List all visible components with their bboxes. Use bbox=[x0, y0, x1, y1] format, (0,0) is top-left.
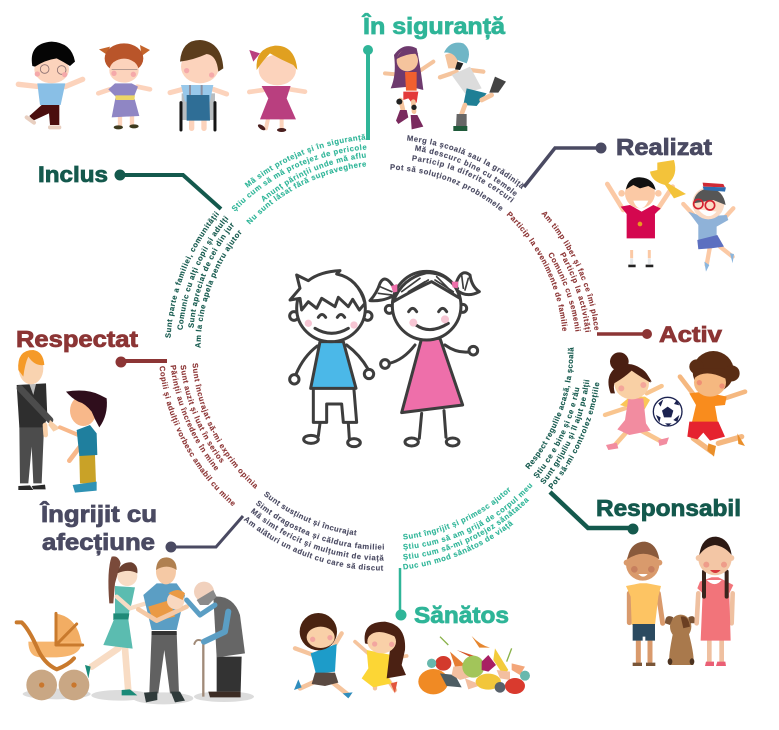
child in wheelchair bbox=[170, 40, 227, 130]
girl bbox=[370, 271, 479, 446]
arc text: Sănătos: Sunt îngrijit și primesc ajutor bbox=[403, 487, 510, 540]
man in suit bbox=[17, 350, 60, 490]
arc text: Realizat: Pot să soluționez problemele bbox=[390, 164, 502, 211]
connector: Sănătos bbox=[396, 568, 406, 620]
connector: Inclus bbox=[114, 170, 221, 209]
arc text: Respectat: Părinții au încredere în mine bbox=[170, 365, 218, 470]
arc text: În siguranță: Mă simt protejat și în siguranță bbox=[244, 134, 366, 188]
connector: Realizat bbox=[524, 142, 606, 187]
roller girl bbox=[385, 46, 433, 129]
arc text: Activ bbox=[506, 211, 598, 332]
girl bbox=[696, 537, 734, 666]
jumping boy bbox=[294, 613, 353, 698]
illustration: healthy children and food bbox=[294, 613, 530, 698]
child with glasses and blue shirt bbox=[18, 42, 83, 127]
child with purple dress bbox=[98, 43, 150, 129]
arc text: Inclus: Sunt apreciat de cei din jur bbox=[188, 222, 234, 328]
arc text: Activ: Particip la evenimente de familie bbox=[506, 211, 568, 332]
arc text: În siguranță: Știu cum să mă protejez de pericole bbox=[232, 144, 366, 212]
boy in blue shirt bbox=[60, 391, 107, 493]
arc text: Realizat: Mă descurc bine cu temele bbox=[415, 145, 517, 196]
heading: Îngrijit cu afecțiune: Îngrijit cu bbox=[40, 500, 157, 527]
arc text: Îngrijit cu afecțiune: Am alături un adult cu care să discut bbox=[244, 517, 384, 571]
stroller bbox=[17, 613, 89, 700]
heading: Responsabil: Responsabil bbox=[596, 495, 741, 521]
arc text: Inclus bbox=[165, 211, 242, 348]
illustration: four included children bbox=[18, 40, 305, 132]
heading: Inclus: Inclus bbox=[38, 162, 108, 187]
arc text: Responsabil: Știu ce e bine și ce e rău bbox=[534, 387, 580, 478]
illustration: achieving children bbox=[607, 160, 734, 272]
arc text: Activ: Am timp liber și fac ce îmi place bbox=[541, 212, 598, 330]
arc text: Respectat: Sunt încurajat să-mi exprim opinia bbox=[192, 363, 258, 489]
woman bbox=[85, 556, 148, 695]
arc text: Sănătos: Știu cum să-mi protejez sănătatea bbox=[403, 498, 530, 562]
arc text: Realizat: Particip la diferite cercuri bbox=[412, 155, 514, 203]
arc text: Activ: Particip la activități bbox=[560, 252, 591, 332]
arc text: Inclus: Comunic cu alți copii și adulți bbox=[177, 216, 228, 330]
connector: Responsabil bbox=[550, 492, 638, 534]
arc text: Responsabil: Pot să-mi controlez emoțiile bbox=[548, 382, 600, 490]
boy with trophy bbox=[607, 160, 686, 266]
heading: Sănătos: Sănătos bbox=[414, 602, 509, 628]
heading: Realizat: Realizat bbox=[616, 134, 712, 160]
arc text: Inclus: Am la cine apela pentru ajutor bbox=[195, 230, 242, 348]
arc text: Îngrijit cu afecțiune: Simt dragostea și căldura familiei bbox=[256, 500, 384, 550]
arc text: În siguranță: Anunț părinții unde mă aflu bbox=[262, 152, 366, 202]
heading: Îngrijit cu afecțiune: afecțiune bbox=[42, 529, 155, 556]
active boy bbox=[680, 351, 745, 457]
boy with books and red glasses bbox=[683, 183, 734, 272]
heading: În siguranță: În siguranță bbox=[362, 12, 505, 40]
boy bbox=[290, 271, 374, 447]
child in pink dress bbox=[249, 46, 305, 132]
heading: Respectat: Respectat bbox=[16, 326, 138, 352]
connector: Respectat bbox=[116, 356, 167, 368]
roller boy bbox=[440, 43, 506, 131]
arc text: În siguranță: Nu sunt lăsat fără supraveghere bbox=[246, 162, 366, 224]
arc text: Responsabil: Sunt grijuliu și îl ajut pe alții bbox=[540, 380, 590, 484]
connector: În siguranță bbox=[363, 45, 373, 140]
soccer ball bbox=[653, 397, 682, 426]
arc text: Respectat: Sunt auzit și luat în serios bbox=[180, 365, 224, 463]
connector: Activ bbox=[597, 329, 652, 339]
arc text: Îngrijit cu afecțiune bbox=[244, 492, 384, 571]
arc text: Îngrijit cu afecțiune: Sunt susținut și încurajat bbox=[264, 492, 357, 536]
illustration: central boy and girl bbox=[290, 271, 479, 447]
dog bbox=[665, 615, 695, 665]
illustration: active children with ball bbox=[605, 351, 745, 457]
man holding baby bbox=[138, 557, 187, 702]
arc text: Realizat bbox=[390, 135, 524, 211]
arc text: Sănătos: Duc un mod sănătos de viață bbox=[403, 520, 514, 570]
arc text: Sănătos: Știu cum să am grijă de corpul meu bbox=[403, 483, 532, 552]
jumping girl bbox=[355, 622, 407, 693]
arc text: Realizat: Merg la școală sau la grădiniță bbox=[407, 135, 524, 190]
arc text: Îngrijit cu afecțiune: Mă simt fericit și mulțumit de viață bbox=[250, 508, 384, 562]
illustration: responsible children with dog bbox=[624, 537, 734, 666]
arc text: Responsabil bbox=[525, 347, 600, 490]
illustration: roller skating children bbox=[385, 43, 506, 131]
illustration: man shaking hands with boy bbox=[17, 350, 107, 493]
active girl bbox=[605, 352, 669, 450]
boy bbox=[624, 542, 663, 666]
arc text: Activ: Comunic cu semenii bbox=[548, 252, 581, 332]
arc text: Inclus: Sunt parte a familiei, comunității bbox=[165, 211, 219, 338]
arc text: Responsabil: Respect regulile acasă, la școală bbox=[525, 347, 574, 470]
heading: Activ: Activ bbox=[659, 322, 723, 347]
arc text: Respectat: Copiii și adulții vorbesc amabil cu mine bbox=[160, 366, 235, 506]
pile of vegetables and fruit bbox=[418, 636, 530, 694]
connector: Îngrijit bbox=[166, 516, 243, 552]
grandfather with cane bbox=[187, 582, 245, 697]
ground shadows bbox=[23, 689, 254, 704]
heading: Îngrijit cu afecțiune bbox=[40, 500, 157, 556]
illustration: caring family with stroller bbox=[17, 556, 254, 704]
